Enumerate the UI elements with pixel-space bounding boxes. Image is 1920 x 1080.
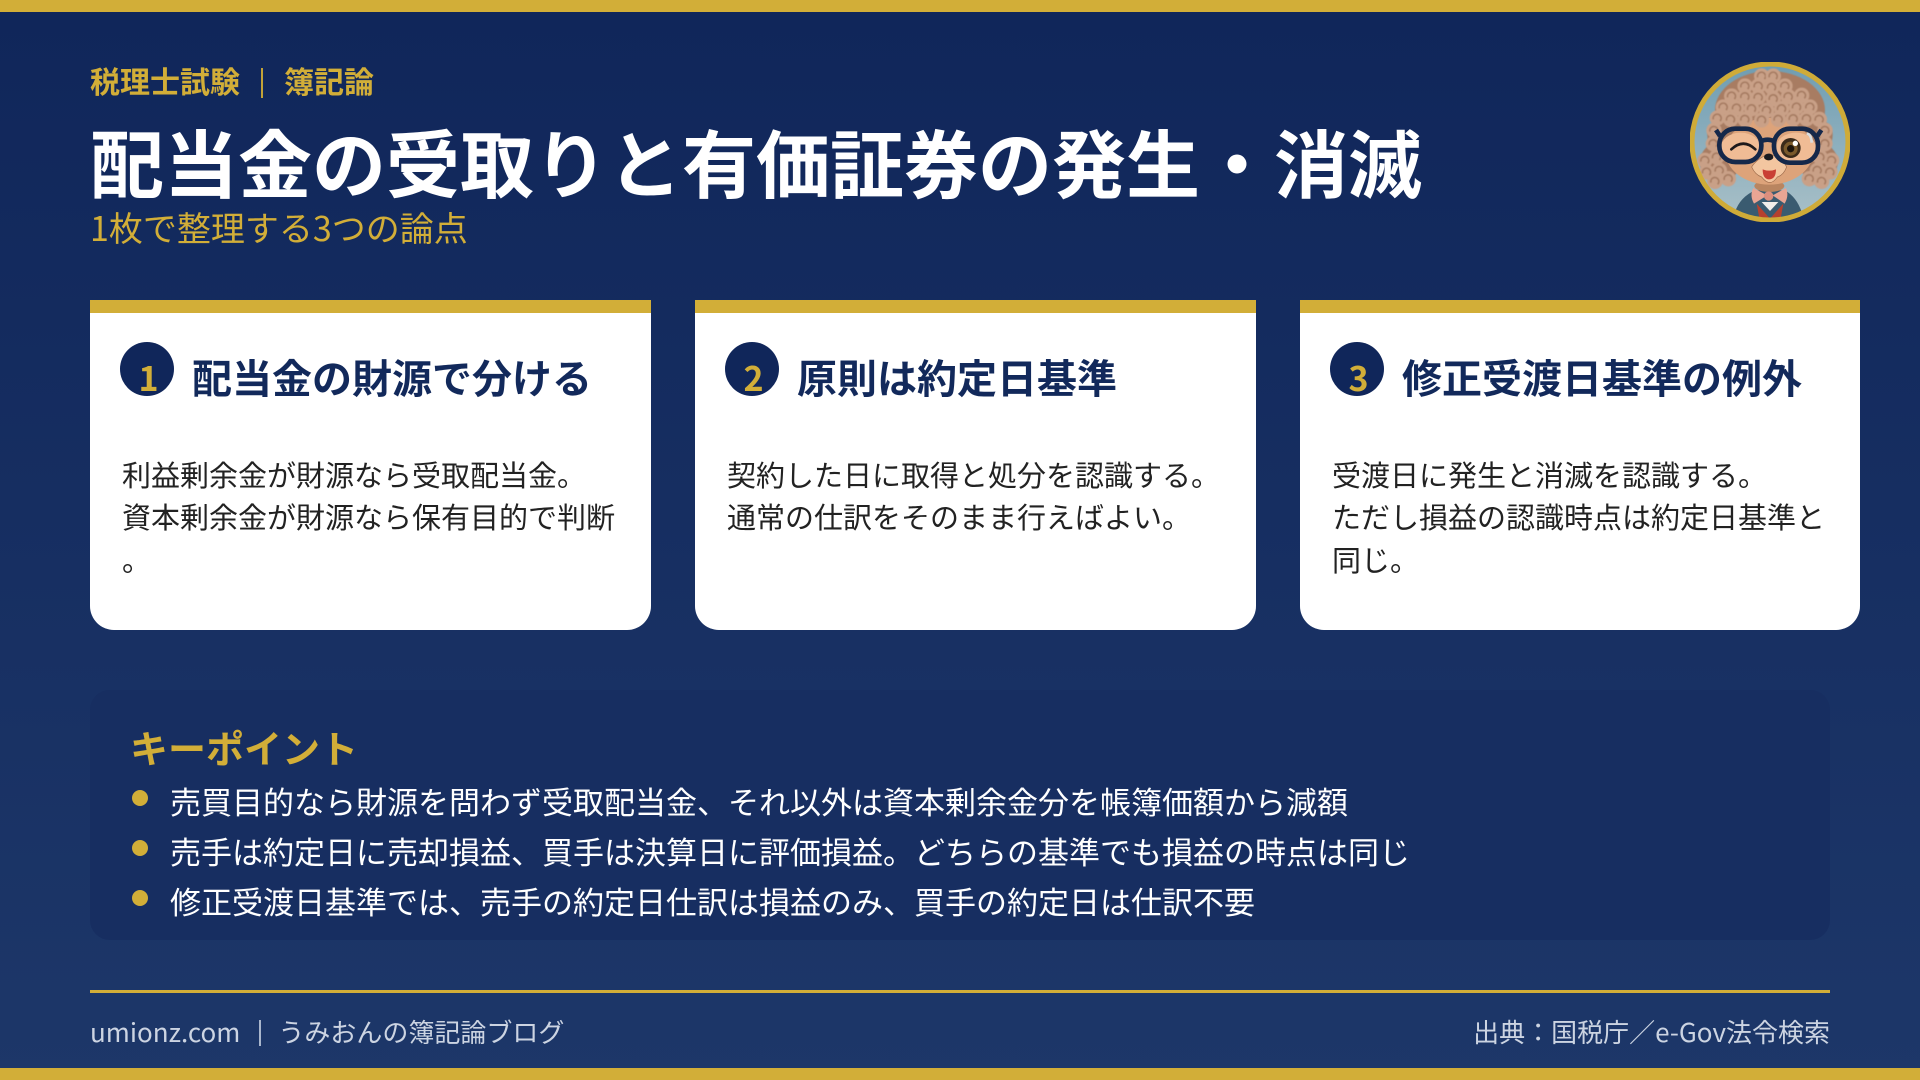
badge 2: 2 [743, 352, 764, 401]
category label: 税理士試験 簿記論 [90, 58, 374, 102]
bullet 2 [132, 840, 148, 856]
panel: card 2 [695, 300, 1256, 630]
card 3 text: ただし損益の認識時点は約定日基準と [1332, 495, 1825, 537]
title: 配当金の受取りと有価証券の発生・消滅 [90, 107, 1422, 214]
panel: card 3 [1300, 300, 1860, 630]
footer left: site name: umionz.com うみおんの簿記論ブログ [90, 1013, 564, 1050]
card 2 text: 契約した日に取得と処分を認識する。 [727, 453, 1220, 495]
key points heading: キーポイント [130, 719, 358, 774]
panel: card 1 [90, 300, 651, 630]
card 1 text: 資本剰余金が財源なら保有目的で判断 [122, 495, 615, 537]
glasses [1716, 129, 1821, 163]
badge 1 [120, 342, 174, 396]
footer right: source: 出典：国税庁／e-Gov法令検索 [1473, 1013, 1830, 1050]
card 3 text [1332, 453, 1825, 580]
cheeks and muzzle [1722, 132, 1759, 160]
bullet 1 [132, 790, 148, 806]
badge 3 [1330, 342, 1384, 396]
jacket [1736, 190, 1802, 218]
card 1 text [122, 453, 615, 580]
curls [1697, 68, 1839, 189]
back hair [1700, 71, 1838, 182]
card 2 text: 通常の仕訳をそのまま行えばよい。 [727, 495, 1191, 537]
badge 2 [725, 342, 779, 396]
neck [1754, 183, 1784, 192]
open eye [1781, 138, 1801, 158]
card 1 text: 。 [122, 538, 151, 580]
badge 3: 3 [1348, 352, 1369, 401]
point 2: 売手は約定日に売却損益、買手は決算日に評価損益。どちらの基準でも損益の時点は同じ [170, 828, 1410, 873]
wink eye [1731, 144, 1755, 149]
badge 1: 1 [138, 352, 159, 401]
card 1 text: 利益剰余金が財源なら受取配当金。 [122, 453, 586, 495]
card 3 heading: 修正受渡日基準の例外 [1402, 347, 1802, 405]
card 3 text: 同じ。 [1332, 538, 1419, 580]
card 2 text [727, 453, 1220, 537]
card 2 heading: 原則は約定日基準 [797, 347, 1117, 405]
card 1 heading: 配当金の財源で分ける [192, 347, 592, 405]
card 3 text: 受渡日に発生と消滅を認識する。 [1332, 453, 1767, 495]
point 1: 売買目的なら財源を問わず受取配当金、それ以外は資本剰余金分を帳簿価額から減額 [170, 778, 1348, 823]
bullet 3 [132, 890, 148, 906]
panel: key points [90, 690, 1830, 940]
top gold bar [0, 0, 1920, 12]
subtitle: 1枚で整理する3つの論点 [90, 202, 468, 251]
point 3: 修正受渡日基準では、売手の約定日仕訳は損益のみ、買手の約定日は仕訳不要 [170, 878, 1255, 923]
bow tie [1752, 188, 1764, 204]
icon: poodle mascot avatar [1690, 62, 1850, 222]
bottom gold bar [0, 1068, 1920, 1080]
face [1725, 118, 1813, 185]
